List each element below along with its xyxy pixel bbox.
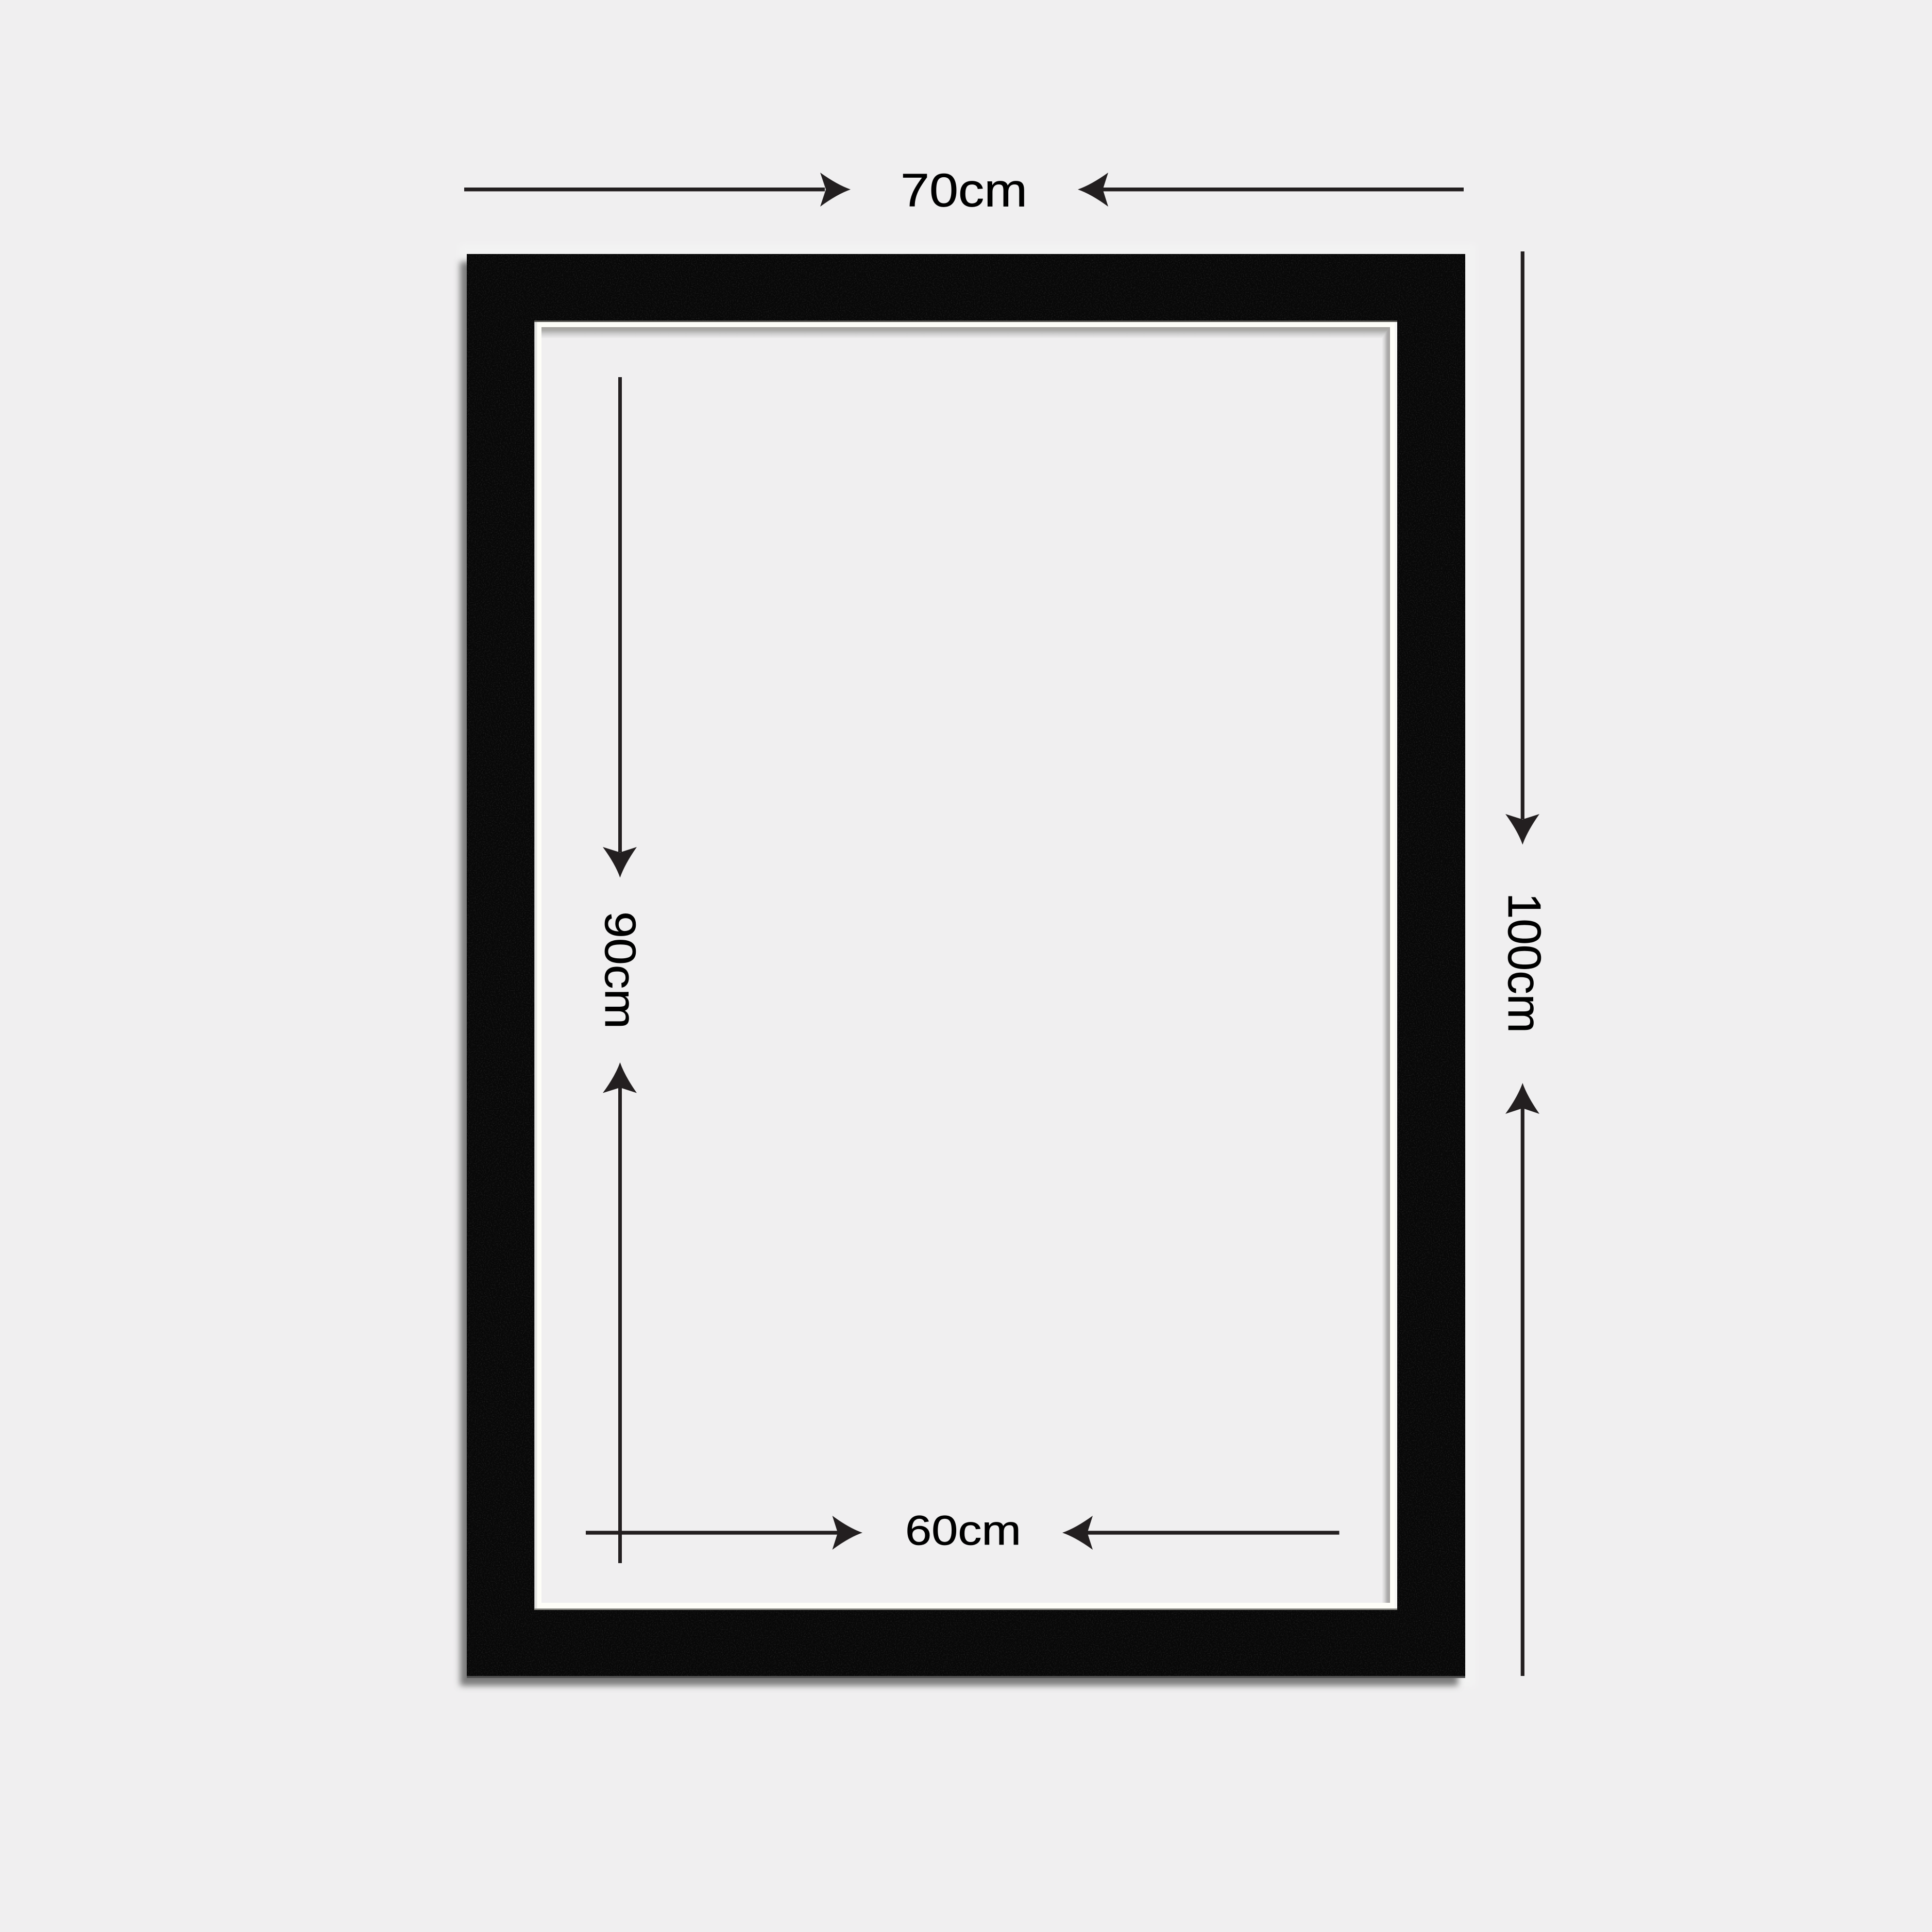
inner shadow top bbox=[541, 327, 1390, 338]
label: 60cm: 60cm bbox=[905, 1507, 1021, 1554]
frame texture bbox=[467, 254, 1465, 1676]
mat border bottom bbox=[534, 1608, 1397, 1610]
frame body bbox=[467, 254, 1465, 1676]
inner opening bbox=[541, 327, 1390, 1603]
arrow: inner bottom right bbox=[1062, 1516, 1340, 1550]
arrow: inner left upper bbox=[603, 377, 637, 878]
arrow: right upper bbox=[1505, 251, 1539, 845]
frame: black frame with white mat and shadows bbox=[460, 244, 1476, 1687]
mat bbox=[535, 322, 1397, 1608]
arrow: right lower bbox=[1505, 1083, 1539, 1676]
arrow: inner left lower bbox=[603, 1062, 637, 1563]
label: 100cm: 100cm bbox=[1498, 893, 1550, 1033]
arrow: inner bottom left bbox=[586, 1516, 862, 1550]
inner shadow right bbox=[1382, 327, 1390, 1603]
frame glow bbox=[460, 244, 1476, 1687]
mat left edge bbox=[535, 322, 537, 1608]
arrow: top right bbox=[1078, 173, 1464, 207]
label: 70cm: 70cm bbox=[901, 165, 1027, 217]
mat right edge bbox=[1395, 322, 1397, 1608]
frame bottom edge bbox=[467, 1676, 1465, 1678]
frame drop shadow bbox=[460, 262, 1458, 1686]
arrow: top left bbox=[464, 173, 851, 207]
mat border top bbox=[534, 320, 1397, 322]
label: 90cm: 90cm bbox=[596, 911, 645, 1029]
